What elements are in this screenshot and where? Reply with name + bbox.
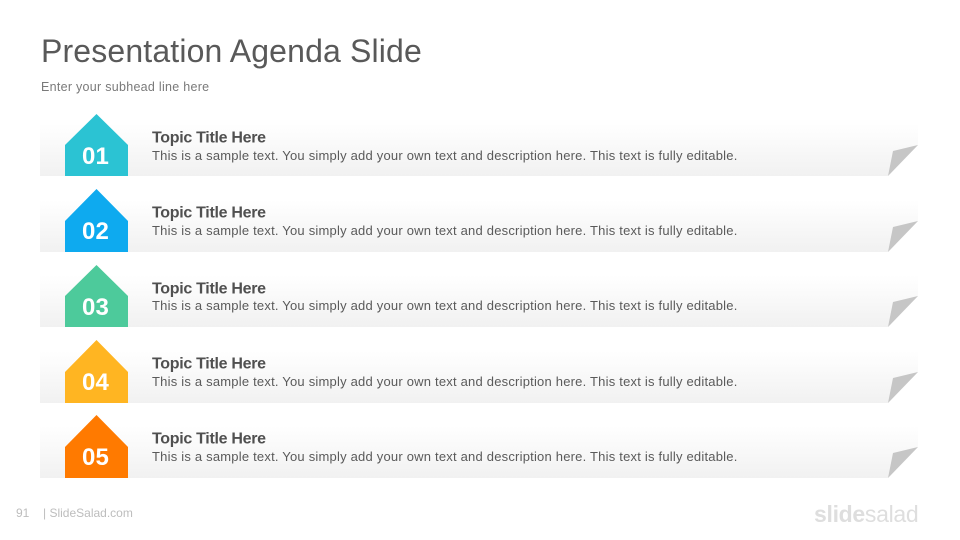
agenda row 2: Topic Title Here — [152, 204, 266, 222]
agenda row 2: This is a sample text. You simply add your own text and description here. This text is fully editable. — [152, 223, 738, 238]
agenda row 5: This is a sample text. You simply add your own text and description here. This text is fully editable. — [152, 449, 738, 464]
agenda row 4 — [40, 340, 918, 403]
logo wordmark: slidesalad — [814, 501, 918, 527]
agenda row 1: This is a sample text. You simply add your own text and description here. This text is fully editable. — [152, 148, 738, 163]
agenda row 4: Topic Title Here — [152, 356, 266, 372]
agenda row 5: 05 — [82, 444, 109, 471]
agenda row 1 — [40, 114, 918, 176]
subhead: Enter your subhead line here — [41, 80, 209, 94]
agenda row 5: Topic Title Here — [152, 430, 266, 448]
agenda row 4: 04 — [82, 369, 109, 396]
agenda row 3: Topic Title Here — [152, 280, 266, 297]
page number: 91 — [16, 506, 29, 520]
agenda row 1: Topic Title Here — [152, 130, 266, 146]
agenda row 2: 02 — [82, 218, 109, 245]
footer site name: | SlideSalad.com — [43, 506, 133, 520]
title: Presentation Agenda Slide — [41, 33, 422, 69]
agenda row 3: This is a sample text. You simply add your own text and description here. This text is fully editable. — [152, 298, 738, 313]
agenda row 4: This is a sample text. You simply add your own text and description here. This text is fully editable. — [152, 374, 738, 389]
agenda row 3 — [40, 265, 918, 327]
agenda row 1: 01 — [82, 143, 109, 170]
agenda row 3: 03 — [82, 294, 109, 321]
agenda row 2 — [40, 189, 918, 252]
agenda row 5 — [40, 415, 918, 478]
